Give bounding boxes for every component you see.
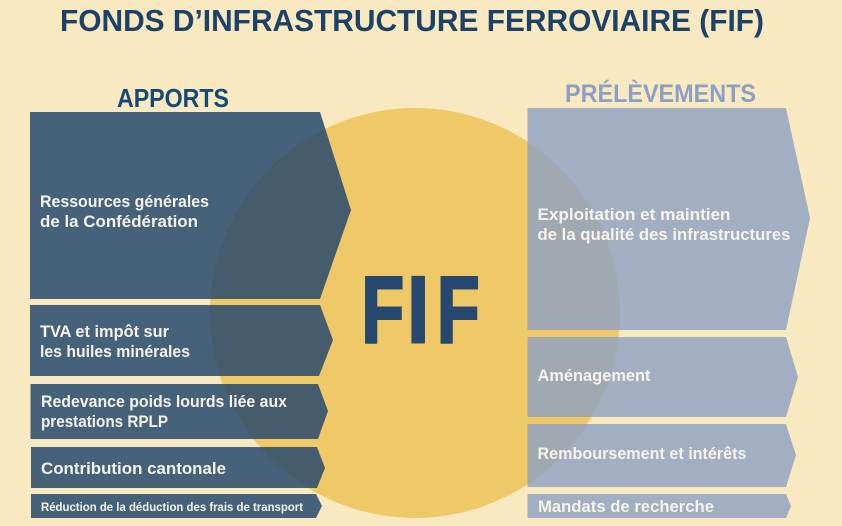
arrow: ressources générales: Ressources générales xyxy=(40,193,209,211)
central circle xyxy=(210,108,620,518)
arrow: contribution cantonale: Contribution cantonale xyxy=(41,460,226,478)
arrow: ressources générales xyxy=(30,112,351,299)
arrow: réduction de la déduction xyxy=(31,494,322,518)
central label FIF xyxy=(362,257,479,363)
arrow: redevance poids lourds xyxy=(30,384,328,439)
arrow: exploitation xyxy=(528,108,810,330)
panel: prélèvements arrows xyxy=(528,108,810,518)
arrow: redevance poids lourds: prestations RPLP xyxy=(41,413,168,431)
central label FIF: F xyxy=(362,257,404,362)
arrow: TVA xyxy=(30,305,333,376)
central label FIF: I xyxy=(408,258,429,363)
arrow: contribution cantonale xyxy=(31,447,325,488)
panel: apports arrows xyxy=(30,112,351,518)
arrow: remboursement: Remboursement et intérêts xyxy=(538,445,746,463)
arrow: redevance poids lourds: Redevance poids lourds liée aux xyxy=(41,393,288,411)
arrow: exploitation: de la qualité des infrastructures xyxy=(538,226,790,244)
title: FONDS D’INFRASTRUCTURE FERROVIAIRE (FIF) xyxy=(60,3,764,38)
arrow: exploitation: Exploitation et maintien xyxy=(538,206,730,224)
arrow: ressources générales: de la Confédération xyxy=(40,213,198,231)
heading: prélèvements: PRÉLÈVEMENTS xyxy=(565,79,756,108)
arrow: remboursement xyxy=(528,424,796,487)
arrow: TVA: TVA et impôt sur xyxy=(40,323,170,341)
arrow: réduction de la déduction: Réduction de la déduction des frais de transport xyxy=(41,500,303,514)
arrow: mandats de recherche xyxy=(528,494,791,518)
arrow: mandats de recherche: Mandats de recherche xyxy=(538,498,714,516)
central label FIF: F xyxy=(437,257,479,362)
arrow: TVA: les huiles minérales xyxy=(40,343,190,361)
arrow: aménagement xyxy=(528,337,798,417)
heading: apports: APPORTS xyxy=(117,85,229,113)
arrow: aménagement: Aménagement xyxy=(538,367,651,385)
